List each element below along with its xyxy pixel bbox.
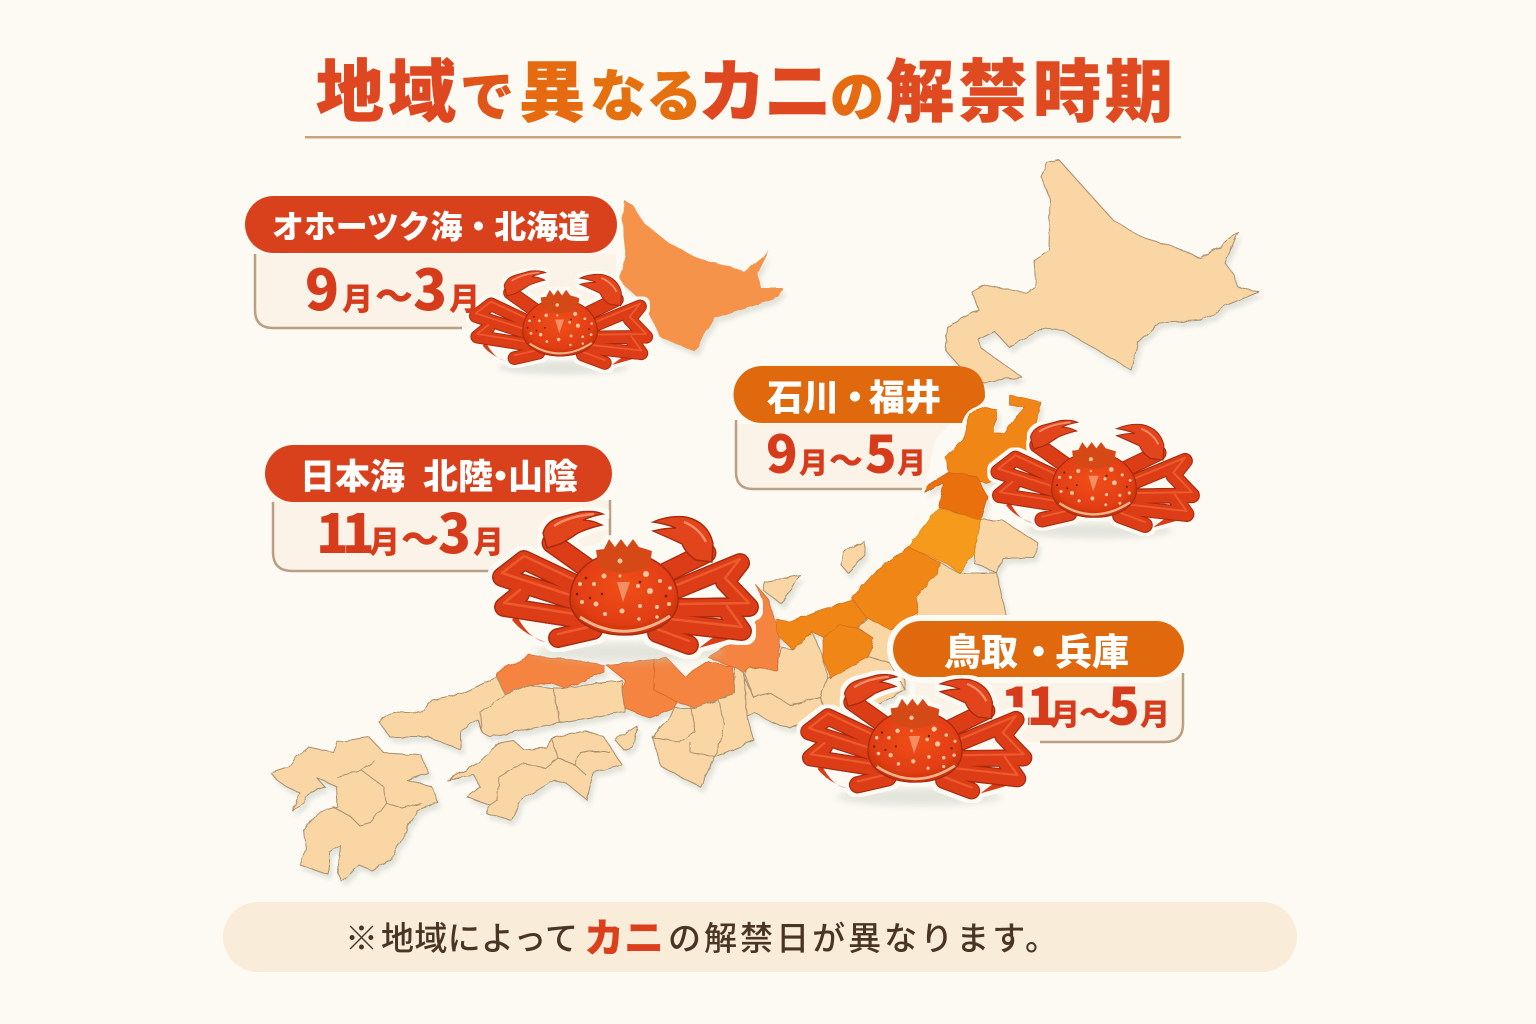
date range: 〜 — [401, 509, 439, 564]
footer note — [223, 902, 1297, 972]
title underline — [305, 136, 1181, 138]
region pill — [265, 445, 612, 502]
date range: 5 — [865, 413, 897, 488]
map: Sado island — [841, 541, 865, 573]
region pill — [245, 196, 617, 253]
panel border — [736, 420, 922, 489]
panel border — [1040, 673, 1183, 742]
date range: 月 — [1050, 690, 1080, 734]
footer text: ※ — [345, 912, 378, 960]
date panel — [736, 424, 950, 489]
date range: 9 — [766, 413, 798, 488]
callout: Okhotsk and Hokkaido — [245, 196, 617, 328]
callout: Tottori and Hyogo — [887, 615, 1190, 742]
date range: Okhotsk and Hokkaido: 月 — [449, 274, 480, 319]
crab: Ishikawa and Fukui — [998, 420, 1194, 539]
date range: Okhotsk and Hokkaido: 月 — [342, 274, 373, 319]
region label: 北陸 — [423, 449, 493, 500]
date range: 月 — [1140, 690, 1170, 734]
title: 地域 — [316, 55, 456, 131]
date range: 月 — [369, 517, 400, 562]
date range: 〜 — [829, 434, 863, 483]
region label: 鳥取 — [944, 622, 1018, 676]
title — [316, 55, 1173, 131]
region label: ・ — [483, 449, 518, 500]
region label: ・ — [837, 369, 873, 421]
region pill — [734, 366, 985, 423]
title: で — [460, 68, 514, 128]
title: なる — [590, 65, 702, 128]
date range: Okhotsk and Hokkaido: 〜 — [375, 266, 413, 321]
region label: オホーツク海・北海道 — [272, 202, 590, 248]
footer text continued: の解禁日が異なります。 — [668, 912, 1058, 960]
region pill — [893, 621, 1184, 677]
callout: Ishikawa and Fukui — [734, 366, 985, 489]
map: Awaji island — [615, 726, 637, 750]
callout: Sea of Japan Hokuriku and San'in — [265, 445, 612, 571]
map: highlighted northern coast — [772, 395, 1041, 678]
date range: 〜 — [1079, 689, 1111, 735]
map: highlighted western coast — [495, 585, 780, 718]
date range: 5 — [1108, 665, 1140, 740]
region label: 山陰 — [508, 449, 578, 500]
date range: 3 — [438, 490, 471, 569]
panel border — [273, 500, 610, 571]
footer bar — [223, 902, 1297, 972]
date range: 月 — [799, 440, 828, 482]
crab: Tottori and Hyogo — [809, 675, 1026, 806]
map: Okhotsk Hokkaido highlight — [618, 200, 783, 352]
footer text: 地域によって — [381, 912, 578, 960]
date range: Okhotsk and Hokkaido: 9 — [305, 246, 339, 327]
map: Kii peninsula — [652, 667, 754, 787]
date panel — [915, 676, 1183, 742]
crab: Sea of Japan — [502, 511, 752, 662]
region label: 福井 — [869, 369, 941, 421]
date panel — [272, 500, 610, 571]
title: の — [830, 68, 884, 128]
date range: 11 — [316, 490, 372, 569]
region label: 日本海 — [300, 449, 405, 500]
map of Japan — [271, 160, 1259, 882]
title: 異 — [519, 56, 585, 130]
region label: 兵庫 — [1055, 622, 1129, 676]
title: 解禁時期 — [886, 55, 1173, 131]
map: Chugoku — [379, 677, 625, 750]
date range: Okhotsk and Hokkaido: 3 — [413, 246, 447, 327]
footer highlight: カニ — [584, 906, 664, 964]
region halo — [887, 615, 1190, 683]
title: カニ — [698, 55, 832, 131]
date range: 月 — [473, 517, 504, 562]
panel border — [255, 254, 462, 328]
date range: 月 — [897, 440, 926, 482]
map: pale eastern Honshu — [740, 520, 1038, 727]
crab: Okhotsk — [476, 271, 648, 375]
map: northern island — [945, 160, 1259, 382]
map: Kyushu — [271, 737, 438, 882]
map: pale peninsula — [763, 575, 800, 603]
date panel — [254, 254, 616, 328]
map: Shikoku — [447, 731, 622, 820]
date range: 11 — [1001, 665, 1056, 740]
region label: ・ — [1020, 622, 1057, 676]
region label: 石川 — [767, 369, 839, 421]
